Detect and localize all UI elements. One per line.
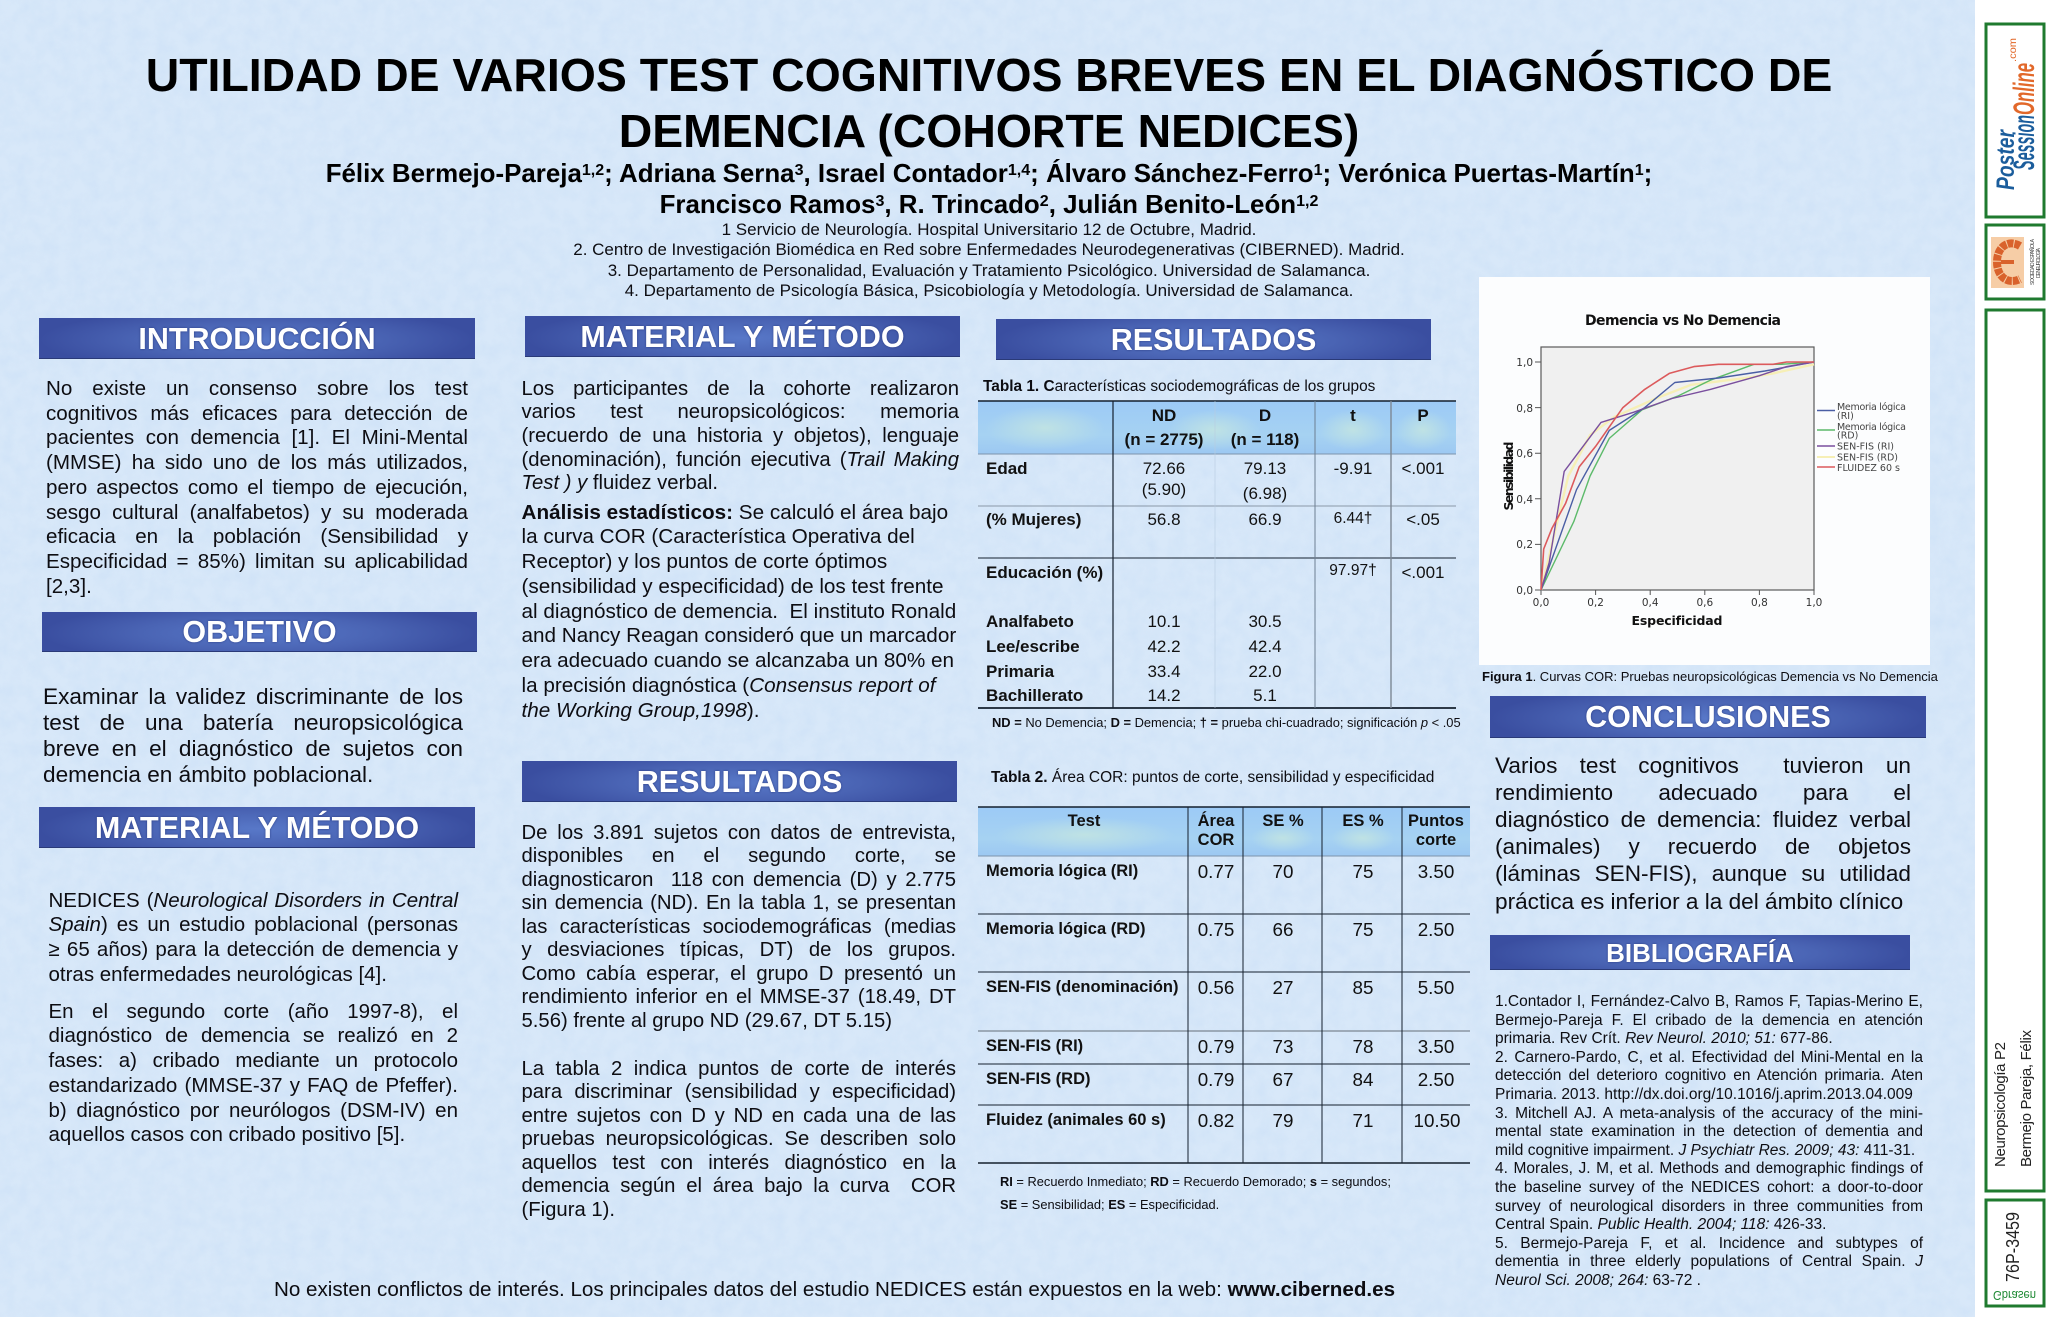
table 2 values: 10.50: [1414, 1110, 1460, 1131]
table 1 values: <.05: [1406, 510, 1440, 529]
table 2 footnote: RI = Recuerdo Inmediato; RD = Recuerdo Demorado; s = segundos;: [1000, 1174, 1391, 1189]
text: objetivo: [43, 684, 463, 787]
text: conclusiones: Varios test cognitivos tuvieron un: [1495, 753, 1911, 778]
text: resultados tabla 2: demencia según el área bajo la curva COR: [522, 1175, 956, 1197]
heading: material y método (columna 1): [39, 807, 475, 848]
table 2 values: 2.50: [1418, 919, 1454, 940]
table 2 values: 0.75: [1198, 919, 1234, 940]
table 1 footnote: ND = No Demencia; D = Demencia; † = prueba chi-cuadrado; significación p < .05: [992, 715, 1461, 730]
axis ticks and labels: 1,0: [1516, 357, 1533, 369]
text: bibliografía: detección del deterioro cognitivo en Atención primaria. Aten: [1495, 1067, 1923, 1084]
box: brain logo: SOCIEDAD ESPAÑOLA: [2029, 238, 2036, 285]
heading: bibliografía: [1490, 935, 1910, 970]
text: segundo corte: fases: a) cribado mediante un protocolo: [48, 1049, 458, 1072]
text: NEDICES description: ≥ 65 años) para la detección de demencia y: [48, 938, 458, 961]
text: segundo corte: estandarizado (MMSE-37 y FAQ de Pfeffer).: [48, 1074, 458, 1097]
box: poster number: 76P-3459: [2003, 1212, 2023, 1282]
axis ticks and labels: 0,6: [1516, 448, 1533, 460]
text: resultados sujetos: sin demencia (ND). En la tabla 1, se presentan: [522, 892, 956, 914]
table 2 values: 78: [1353, 1036, 1373, 1057]
text: segundo corte: [48, 1000, 458, 1146]
box: session and author: [1986, 310, 2044, 1191]
table 1: características sociodemográficas: [978, 400, 1456, 709]
plot area: [1541, 347, 1814, 590]
text: bibliografía: primaria. Rev Crít. Rev Neurol. 2010; 51: 677-86.: [1495, 1030, 1833, 1047]
legend: (RI): [1837, 411, 1854, 422]
figure 1: ROC chart panel: [1479, 277, 1930, 665]
table 1 row labels: [986, 459, 1103, 705]
text: bibliografía: mental state examination in the detection of dementia and: [1495, 1123, 1923, 1140]
box: PosterSessionOnline logo: Poster: [1992, 129, 2020, 190]
legend: Memoria lógica: [1837, 402, 1906, 413]
table 1 header row: ND: [1152, 406, 1176, 425]
table 1 values: 30.5: [1248, 612, 1282, 631]
table 2 values: 70: [1273, 861, 1293, 882]
axis ticks and labels: 0,8: [1751, 597, 1768, 609]
table 1 header row: [1125, 406, 1429, 449]
text: introducción: [46, 377, 468, 598]
table 2 header row: COR: [1198, 831, 1234, 849]
table 2 header row: Puntos: [1408, 812, 1464, 830]
text: bibliografía: Primaria. 2013. http://dx.doi.org/10.1016/j.aprim.2013.04.009: [1495, 1086, 1913, 1103]
axis ticks and labels: [1516, 357, 1822, 609]
text: conclusiones: (animales) y recuerdo de objetos: [1495, 834, 1911, 859]
heading: conclusiones: [1490, 696, 1926, 738]
text: segundo corte: En el segundo corte (año 1997-8), el: [48, 1000, 458, 1022]
text: resultados sujetos: Como cabía esperar, el grupo D presentó un: [522, 962, 956, 984]
text: conclusiones: rendimiento adecuado para el: [1495, 780, 1911, 805]
table 2 values: [1198, 861, 1460, 1131]
table 1 values: 97.97†: [1329, 562, 1377, 579]
table 2 row labels: SEN-FIS (RD): [986, 1070, 1090, 1088]
text: análisis estadísticos: [522, 500, 956, 722]
text: bibliografía: 1.Contador I, Fernández-Calvo B, Ramos F, Tapias-Merino E,: [1495, 993, 1923, 1010]
heading: resultados (columna 3): [996, 319, 1431, 360]
heading: bibliografía: BIBLIOGRAFÍA: [1606, 938, 1794, 968]
table 1 values: 6.44†: [1334, 510, 1372, 527]
text: análisis estadísticos: Análisis estadísticos: Se calculó el área bajo: [522, 500, 948, 524]
table 1 values: <.001: [1401, 563, 1445, 582]
text: segundo corte: b) diagnóstico por neurólogos (DSM-IV) en: [48, 1099, 458, 1122]
table 1 values: 79.13: [1244, 459, 1286, 478]
axis titles: Sensibilidad: [1501, 442, 1516, 510]
affiliations: 2. Centro de Investigación Biomédica en Red sobre Enfermedades Neurodegenerativas (CIBERNED). Madrid.: [573, 240, 1405, 259]
text: análisis estadísticos: la precisión diagnóstica (Consensus report of: [522, 674, 935, 697]
box: PosterSessionOnline logo: Online: [2008, 63, 2041, 115]
affiliations: [573, 220, 1405, 300]
table 2 values: 0.79: [1198, 1036, 1234, 1057]
text: NEDICES description: [48, 888, 458, 986]
table 2 header row: [1068, 811, 1464, 849]
text: bibliografía: 3. Mitchell AJ. A meta-analysis of the accuracy of the mini-: [1495, 1105, 1923, 1122]
box: poster number: Gbrasen: [1993, 1288, 2036, 1302]
text: resultados sujetos: [522, 822, 956, 1032]
table 2 values: 75: [1353, 861, 1373, 882]
table 2 values: 3.50: [1418, 1036, 1454, 1057]
table 1 header row: P: [1417, 406, 1429, 425]
table 1 row labels: Analfabeto: [986, 612, 1074, 631]
heading: resultados (columna 2): [522, 761, 957, 802]
table 2 header row: SE %: [1262, 812, 1304, 830]
text: participantes: varios test neuropsicológicos: memoria: [522, 401, 959, 423]
table 1 values: 14.2: [1147, 686, 1181, 705]
table 2: área COR: [978, 806, 1470, 1164]
table 1 row labels: Educación (%): [986, 563, 1103, 582]
heading: material y método (columna 2): [525, 316, 960, 357]
table 2 row labels: Memoria lógica (RD): [986, 920, 1146, 938]
text: conclusiones: diagnóstico de demencia: fluidez verbal: [1495, 807, 1911, 832]
table 2 values: 67: [1273, 1069, 1293, 1090]
text: análisis estadísticos: the Working Group,1998).: [522, 698, 760, 722]
text: objetivo: Examinar la validez discriminante de los: [43, 684, 463, 709]
text: resultados sujetos: diagnosticaron 118 con demencia (D) y 2.775: [522, 868, 956, 890]
text: bibliografía: dementia in three elderly populations of Central Spain. J: [1495, 1253, 1923, 1270]
footer note: No existen conflictos de interés. Los principales datos del estudio NEDICES están expuestos en la web: www.ciberned.es: [274, 1278, 1395, 1300]
heading: conclusiones: CONCLUSIONES: [1585, 700, 1831, 734]
table 2 row labels: SEN-FIS (RI): [986, 1037, 1083, 1055]
axis titles: Especificidad: [1632, 613, 1722, 628]
affiliations: 1 Servicio de Neurología. Hospital Universitario 12 de Octubre, Madrid.: [722, 220, 1256, 239]
text: introducción: eficacia en la población (Sensibilidad y: [46, 525, 468, 548]
title: [146, 49, 1832, 157]
table 2 values: 73: [1273, 1036, 1293, 1057]
legend: (RD): [1837, 430, 1858, 442]
axis titles: [1501, 442, 1722, 628]
text: participantes: Test ) y fluidez verbal.: [522, 472, 718, 494]
text: resultados sujetos: De los 3.891 sujetos con datos de entrevista,: [522, 822, 956, 844]
text: participantes: Los participantes de la cohorte realizaron: [522, 378, 959, 400]
text: participantes: (recuerdo de una historia y objetos), lenguaje: [522, 425, 959, 447]
table 2 header row: Test: [1068, 812, 1101, 830]
text: NEDICES description: Spain) es un estudio poblacional (personas: [48, 913, 458, 936]
table 2 values: 79: [1273, 1110, 1293, 1131]
authors: Félix Bermejo-Pareja1,2; Adriana Serna3, Israel Contador1,4; Álvaro Sánchez-Ferro1; Verónica Puertas-Martín1;: [326, 160, 1652, 188]
table 1 values: 5.1: [1253, 686, 1277, 705]
text: introducción: pero aspectos como el tiempo de ejecución,: [46, 476, 468, 499]
text: participantes: [522, 378, 960, 494]
text: resultados tabla 2: La tabla 2 indica puntos de corte de interés: [522, 1058, 956, 1080]
table 1 values: 66.9: [1248, 510, 1282, 529]
text: bibliografía: survey of neurological disorders in three communities from: [1495, 1198, 1923, 1215]
text: conclusiones: [1495, 753, 1911, 914]
legend: FLUIDEZ 60 s: [1837, 463, 1900, 474]
box: poster number: [1986, 1200, 2044, 1306]
text: resultados tabla 2: aquellos test con interés diagnóstico en la: [522, 1152, 956, 1174]
table 2 values: 5.50: [1418, 977, 1454, 998]
table 2 footnote: SE = Sensibilidad; ES = Especificidad.: [1000, 1197, 1219, 1212]
text: bibliografía: 4. Morales, J. M, et al. Methods and demographic findings of: [1495, 1160, 1923, 1177]
table 2 values: 85: [1353, 977, 1373, 998]
box: session and author: Neuropsicología P2: [1992, 1042, 2009, 1167]
heading: material y método (columna 2): MATERIAL Y MÉTODO: [580, 320, 905, 354]
text: objetivo: demencia en ámbito poblacional.: [43, 762, 373, 787]
table 1 header row: (n = 118): [1231, 430, 1299, 449]
text: bibliografía: 5. Bermejo-Pareja F, et al. Incidence and subtypes of: [1495, 1235, 1923, 1252]
axis ticks and labels: 0,2: [1587, 597, 1604, 609]
text: resultados sujetos: rendimiento inferior en el MMSE-37 (18.49, DT: [522, 986, 956, 1008]
text: bibliografía: the baseline survey of the NEDICES cohort: a door-to-door: [1495, 1179, 1923, 1196]
text: análisis estadísticos: (sensibilidad y especificidad) de los test frente: [522, 575, 944, 598]
table 2 row labels: Fluidez (animales 60 s): [986, 1111, 1166, 1129]
table 1 row labels: Edad: [986, 459, 1028, 478]
box: PosterSessionOnline logo: .com: [2008, 38, 2019, 62]
axis ticks and labels: 0,0: [1516, 585, 1533, 597]
table 2 values: 0.82: [1198, 1110, 1234, 1131]
text: análisis estadísticos: la curva COR (Característica Operativa del: [522, 525, 915, 548]
table 2 values: 2.50: [1418, 1069, 1454, 1090]
axis ticks and labels: 0,0: [1533, 597, 1549, 609]
legend: Memoria lógica: [1837, 422, 1906, 433]
table 1 values: 42.4: [1248, 637, 1282, 656]
table 1 row labels: Bachillerato: [986, 686, 1083, 705]
text: bibliografía: Central Spain. Public Health. 2004; 118: 426-33.: [1495, 1216, 1826, 1233]
text: bibliografía: 2. Carnero-Pardo, C, et al. Efectividad del Mini-Mental en la: [1495, 1049, 1923, 1066]
table 2 values: 84: [1353, 1069, 1373, 1090]
text: resultados sujetos: 5.56) frente al grupo ND (29.67, DT 5.15): [522, 1010, 892, 1032]
table 2 row labels: [986, 862, 1179, 1129]
axis ticks and labels: 0,8: [1516, 403, 1533, 415]
table 1 row labels: Lee/escribe: [986, 637, 1080, 656]
heading: objetivo: [42, 612, 477, 652]
box: brain logo: DE NEUROLOGÍA: [2035, 247, 2042, 278]
text: introducción: [2,3].: [46, 575, 92, 598]
table 1 values: [1142, 459, 1445, 705]
text: análisis estadísticos: al diagnóstico de demencia. El instituto Ronald: [522, 600, 956, 622]
text: análisis estadísticos: and Nancy Reagan consideró que un marcador: [522, 624, 956, 647]
heading: material y método (columna 1): MATERIAL Y MÉTODO: [95, 811, 419, 845]
text: análisis estadísticos: era adecuado cuando se alcanzaba un 80% en: [522, 649, 954, 672]
table 1 row labels: (% Mujeres): [986, 510, 1081, 529]
text: bibliografía: [1495, 993, 1924, 1289]
legend: SEN-FIS (RI): [1837, 442, 1894, 452]
table 1 values: <.001: [1401, 459, 1445, 478]
table 1 values: 42.2: [1147, 637, 1181, 656]
table 1 values: 22.0: [1248, 662, 1282, 681]
table 2 row labels: Memoria lógica (RI): [986, 862, 1138, 880]
text: resultados tabla 2: para discriminar (sensibilidad y especificidad): [522, 1081, 956, 1103]
table 1 values: (5.90): [1142, 480, 1186, 499]
text: NEDICES description: NEDICES (Neurological Disorders in Central: [48, 888, 458, 912]
table 1 header row: (n = 2775): [1125, 430, 1203, 449]
table 1 values: 10.1: [1147, 612, 1181, 631]
table 2 values: 0.56: [1198, 977, 1234, 998]
text: resultados tabla 2: (Figura 1).: [522, 1198, 615, 1220]
table 1 row labels: Primaria: [986, 662, 1055, 681]
text: bibliografía: mild cognitive impairment. J Psychiatr Res. 2009; 43: 411-31.: [1495, 1142, 1915, 1159]
authors: Francisco Ramos3, R. Trincado2, Julián Benito-León1,2: [660, 191, 1318, 219]
text: resultados sujetos: disponibles en el segundo corte, se: [522, 845, 956, 867]
figure 1 caption: Figura 1. Curvas COR: Pruebas neuropsicológicas Demencia vs No Demencia: [1482, 669, 1938, 684]
box: PosterSessionOnline logo: Session: [2008, 115, 2041, 170]
table 2 caption: Tabla 2. Área COR: puntos de corte, sensibilidad y especificidad: [991, 768, 1434, 786]
table 1 values: -9.91: [1334, 459, 1372, 478]
text: resultados sujetos: las características sociodemográficas (medias: [522, 916, 956, 938]
text: segundo corte: aquellos casos con cribado positivo [5].: [48, 1123, 405, 1146]
legend: SEN-FIS (RD): [1837, 452, 1898, 464]
axis ticks and labels: 0,4: [1642, 597, 1659, 609]
text: resultados tabla 2: pruebas neuropsicológicas. Se describen solo: [522, 1128, 956, 1150]
table 1 values: 56.8: [1147, 510, 1181, 529]
table 1 values: (6.98): [1243, 484, 1287, 503]
sidebar: white strip with green boxes: [1984, 22, 2046, 1308]
table 2 footnote: [1000, 1174, 1391, 1212]
table 2 values: 27: [1273, 977, 1293, 998]
text: introducción: cognitivos más eficaces para detección de: [46, 402, 468, 425]
table 1 values: 33.4: [1147, 662, 1181, 681]
affiliations: 3. Departamento de Personalidad, Evaluación y Tratamiento Psicológico. Universidad de Salamanca.: [608, 261, 1370, 280]
axis ticks and labels: 0,6: [1696, 597, 1713, 609]
text: NEDICES description: otras enfermedades neurológicas [4].: [48, 963, 387, 986]
text: resultados tabla 2: [522, 1058, 956, 1220]
text: conclusiones: (láminas SEN-FIS), aunque su utilidad: [1495, 861, 1911, 886]
table 2 header row: ES %: [1342, 812, 1384, 830]
text: objetivo: breve en el diagnóstico de sujetos con: [43, 736, 463, 761]
table 2 values: 66: [1273, 919, 1293, 940]
affiliations: 4. Departamento de Psicología Básica, Psicobiología y Metodología. Universidad de Salamanca.: [625, 281, 1353, 300]
table 1 header row: t: [1350, 406, 1356, 425]
table 2 values: 3.50: [1418, 861, 1454, 882]
box: session and author: Bermejo Pareja, Félix: [2018, 1030, 2035, 1167]
text: resultados sujetos: y desviaciones típicas, DT) de los grupos.: [522, 939, 956, 961]
text: segundo corte: diagnóstico de demencia se realizó en 2: [48, 1024, 458, 1047]
table 2 values: 0.77: [1198, 861, 1234, 882]
heading: resultados (columna 3): RESULTADOS: [1111, 323, 1316, 357]
heading: resultados (columna 2): RESULTADOS: [637, 765, 842, 799]
table 2 values: 75: [1353, 919, 1373, 940]
chart title: Demencia vs No Demencia: [1585, 313, 1781, 329]
text: introducción: No existe un consenso sobre los test: [46, 377, 468, 400]
authors: [326, 159, 1652, 219]
text: análisis estadísticos: Receptor) y los puntos de corte óptimos: [522, 550, 887, 573]
text: participantes: (denominación), función ejecutiva (Trail Making: [522, 449, 959, 471]
table 2 row labels: SEN-FIS (denominación): [986, 978, 1179, 996]
ROC curves: [1541, 362, 1814, 590]
axis ticks and labels: 0,4: [1516, 494, 1533, 506]
text: conclusiones: práctica es inferior a la del ámbito clínico: [1495, 889, 1903, 914]
table 1 header row: D: [1259, 406, 1271, 425]
table 2 header row: Área: [1198, 811, 1235, 830]
legend: [1817, 402, 1906, 474]
table 1 values: 72.66: [1143, 459, 1185, 478]
box: PosterSessionOnline logo: [1986, 24, 2044, 217]
text: bibliografía: Neurol Sci. 2008; 264: 63-72 .: [1495, 1272, 1701, 1289]
heading: introducción: INTRODUCCIÓN: [138, 322, 376, 356]
table 2 values: 0.79: [1198, 1069, 1234, 1090]
axis ticks and labels: 1,0: [1806, 597, 1822, 609]
title: UTILIDAD DE VARIOS TEST COGNITIVOS BREVES EN EL DIAGNÓSTICO DE: [146, 49, 1832, 101]
axis ticks and labels: 0,2: [1516, 539, 1533, 551]
text: bibliografía: Bermejo-Pareja F. El cribado de la demencia en atención: [1495, 1012, 1923, 1029]
text: introducción: Especificidad = 85%) limitan su aplicabilidad: [46, 550, 468, 573]
table 1 caption: Tabla 1. Características sociodemográficas de los grupos: [983, 378, 1375, 395]
text: resultados tabla 2: entre sujetos con D y ND en cada una de las: [522, 1104, 956, 1126]
text: introducción: pacientes con demencia [1]. El Mini-Mental: [46, 426, 468, 449]
text: introducción: (MMSE) ha sido uno de los más utilizados,: [46, 451, 468, 474]
text: objetivo: test de una batería neuropsicológica: [43, 710, 463, 735]
heading: objetivo: OBJETIVO: [182, 615, 337, 649]
title: DEMENCIA (COHORTE NEDICES): [619, 105, 1359, 157]
heading: introducción: [39, 318, 475, 359]
table 2 values: 71: [1353, 1110, 1373, 1131]
text: introducción: sesgo cultural (analfabetos) y su moderada: [46, 501, 468, 524]
box: brain logo: [1986, 225, 2044, 299]
table 2 header row: corte: [1416, 831, 1456, 849]
